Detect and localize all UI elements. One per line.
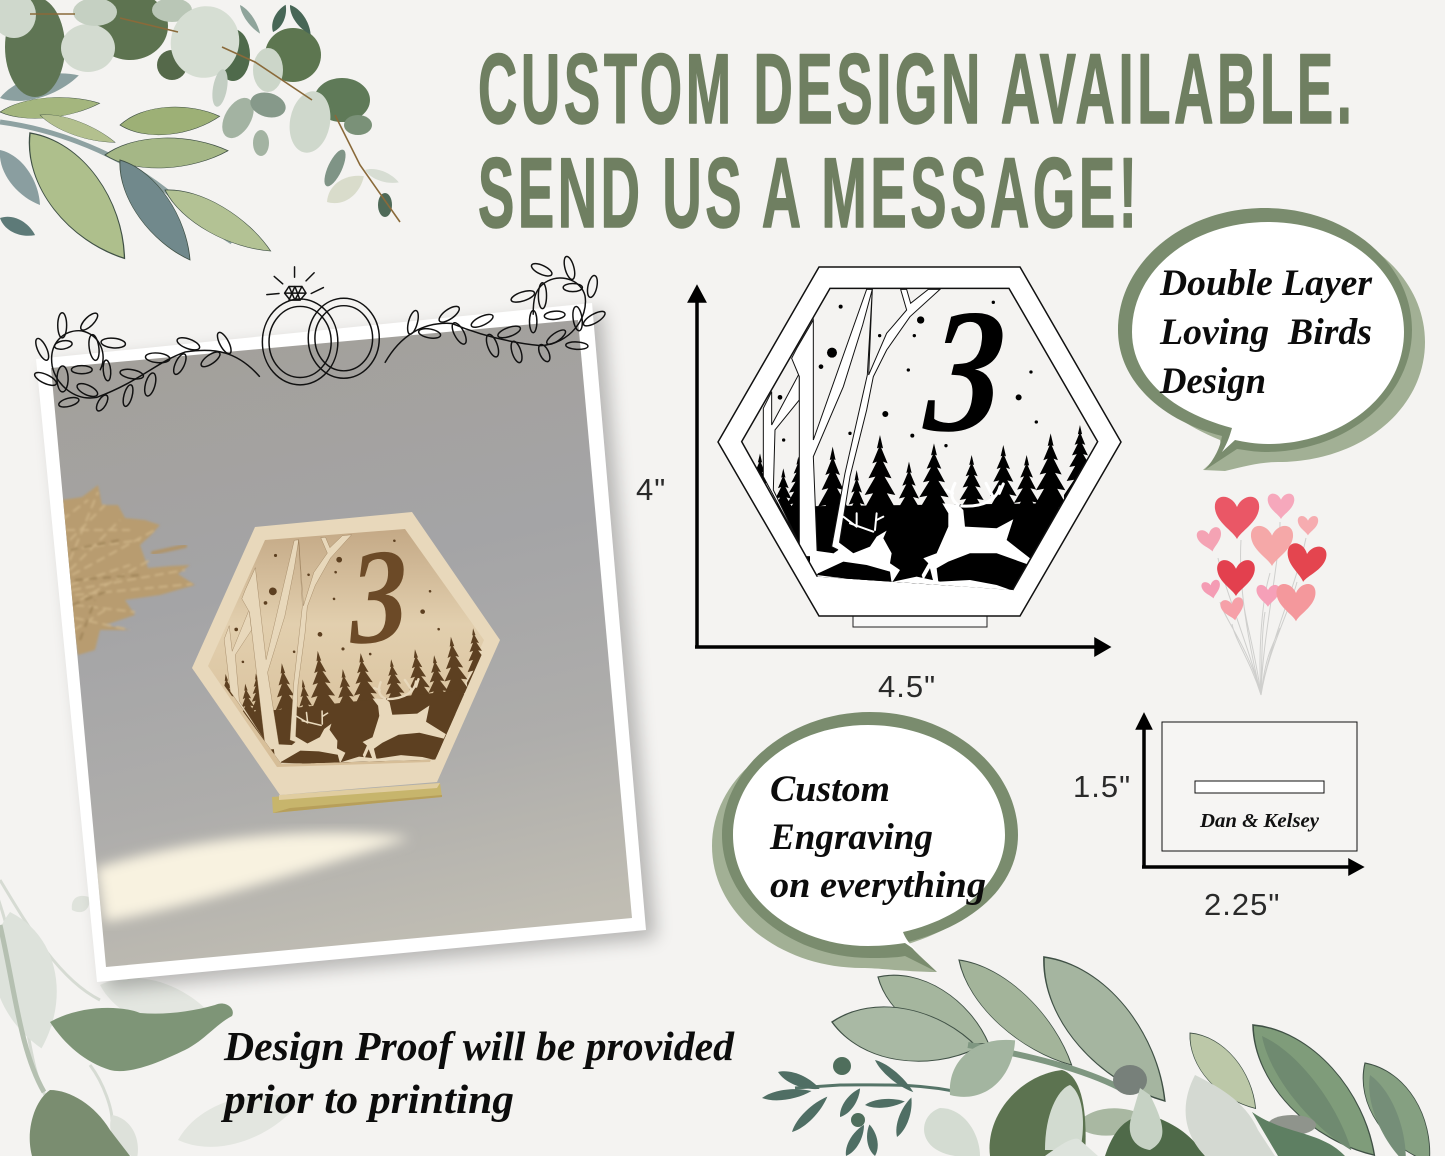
wooden hexagon table number xyxy=(192,512,502,798)
forest, trees and deer cut-out art: 3 xyxy=(918,273,1012,469)
horizontal arrow xyxy=(695,640,1108,654)
bubble text: Loving Birds xyxy=(1159,312,1372,353)
foliage: bottom right watercolor leaves xyxy=(761,938,1445,1156)
bubble text: Custom xyxy=(770,769,890,810)
vertical arrow xyxy=(690,288,704,647)
name card dimension diagram xyxy=(1073,716,1361,922)
bubble text: Engraving xyxy=(769,817,933,858)
height label: 4" xyxy=(636,472,666,507)
card slot xyxy=(1195,781,1324,793)
light beam on table xyxy=(96,832,410,922)
title: SEND US A MESSAGE! xyxy=(478,138,1137,248)
vertical arrow xyxy=(1138,716,1150,867)
title xyxy=(478,34,1352,248)
design proof note xyxy=(221,1023,734,1122)
foliage: top left watercolor leaves xyxy=(0,0,401,274)
speech bubble: double layer xyxy=(1118,208,1425,471)
width label: 4.5" xyxy=(878,669,936,704)
rings with diamond xyxy=(262,267,379,385)
bubble text xyxy=(769,769,986,906)
panel: product photo xyxy=(36,303,656,990)
bubble text: Design xyxy=(1159,361,1266,402)
wooden hexagon table number: 3 xyxy=(347,521,409,674)
foliage: bottom left watercolor leaves xyxy=(0,880,308,1156)
laurel left xyxy=(33,311,259,413)
hexagon inner scene xyxy=(742,288,1098,590)
hexagon outer frame xyxy=(718,267,1121,616)
hexagon dimension diagram xyxy=(636,267,1121,704)
horizontal arrow xyxy=(1142,861,1361,873)
height label: 1.5" xyxy=(1073,769,1131,804)
balloon strings xyxy=(1218,522,1306,695)
wedding rings and laurel line art xyxy=(33,255,607,413)
design proof note: prior to printing xyxy=(221,1076,514,1122)
stand outline xyxy=(853,616,987,627)
laurel right xyxy=(385,255,607,364)
engraved names: Dan & Kelsey xyxy=(1199,810,1319,832)
bubble text xyxy=(1159,263,1373,402)
width label: 2.25" xyxy=(1204,887,1280,922)
wooden stand xyxy=(272,783,442,813)
card outline xyxy=(1162,722,1357,851)
design proof note: Design Proof will be provided xyxy=(223,1023,734,1069)
speech bubble: custom engraving xyxy=(712,712,1018,972)
title: CUSTOM DESIGN AVAILABLE. xyxy=(478,34,1352,144)
bubble text: on everything xyxy=(770,865,986,906)
forest, trees and deer cut-out art xyxy=(742,273,1098,613)
dried pampas grass xyxy=(62,485,195,655)
bubble text: Double Layer xyxy=(1159,263,1373,304)
heart balloons xyxy=(1196,494,1328,695)
